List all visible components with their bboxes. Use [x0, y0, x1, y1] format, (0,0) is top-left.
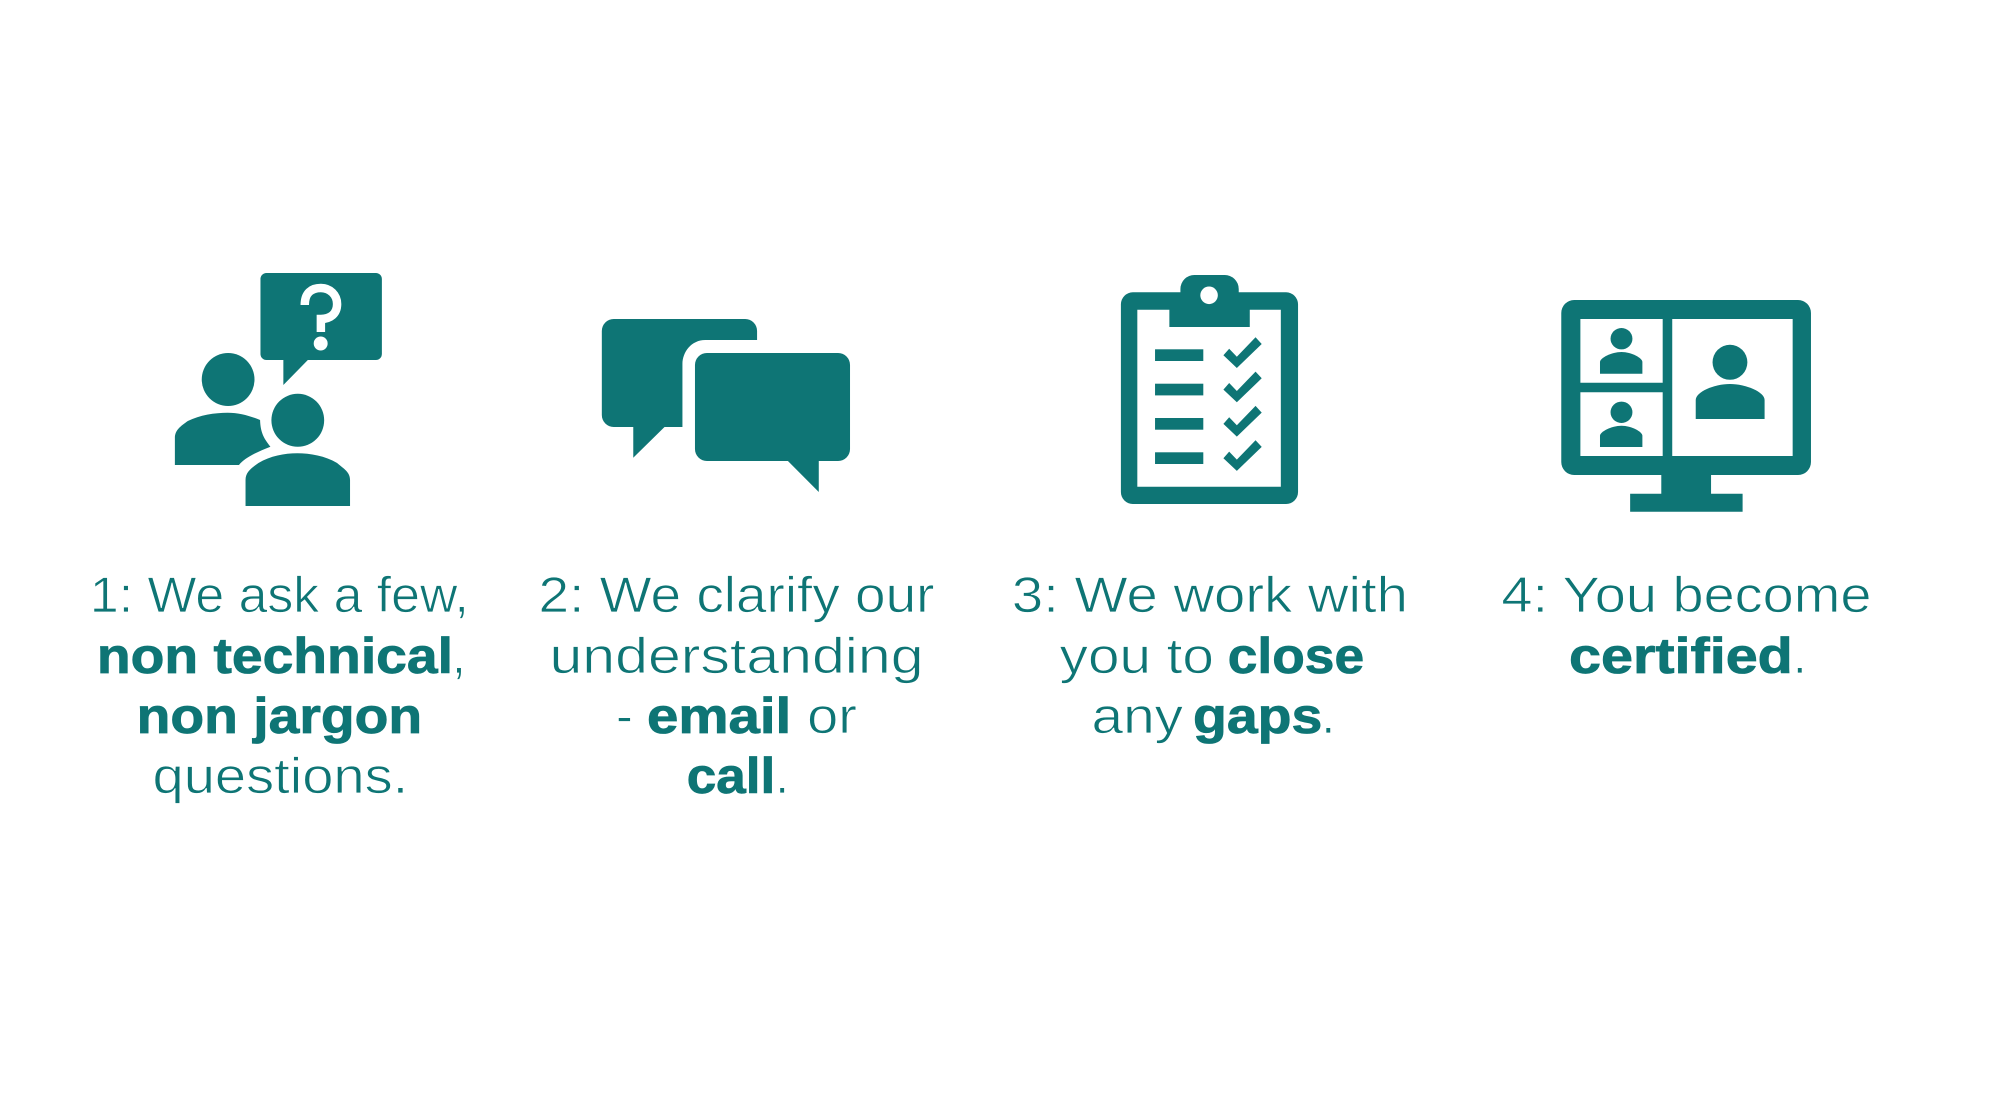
step 3 text: gaps — [1193, 688, 1322, 744]
step 4 text: certified — [1569, 628, 1793, 684]
step 2 text: or — [807, 688, 857, 744]
step 4 text — [1501, 567, 1871, 684]
step 2 text — [539, 567, 934, 804]
icon: two overlapping chat bubbles — [602, 319, 850, 492]
step 2 text: understanding — [549, 628, 924, 684]
step 3 text: close — [1228, 628, 1364, 684]
step 2 text: 2: We clarify our — [539, 567, 934, 623]
step 2 text: . — [775, 748, 789, 804]
step 2 text: - — [616, 688, 633, 744]
icon: monitor with video call — [1561, 300, 1811, 512]
step 1 text — [90, 567, 469, 804]
step 1 text: , — [452, 628, 466, 684]
step 3 text: 3: We work with — [1012, 567, 1408, 623]
step 4 text: . — [1793, 628, 1807, 684]
step 3 text: . — [1321, 688, 1335, 744]
icon: clipboard checklist — [1121, 275, 1298, 504]
step 1 text: non technical — [97, 628, 453, 684]
step 3 text — [1012, 567, 1408, 744]
step 2 text: call — [687, 748, 775, 804]
step 1 text: questions. — [153, 748, 408, 804]
step 1 text: 1: We ask a few, — [90, 567, 469, 623]
step 1 text: non jargon — [137, 688, 422, 744]
step 2 text: email — [647, 688, 791, 744]
icon: two people with question speech bubble — [175, 273, 382, 506]
step 3 text: you to — [1060, 628, 1214, 684]
step 3 text: any — [1092, 688, 1183, 744]
step 4 text: 4: You become — [1501, 567, 1871, 623]
